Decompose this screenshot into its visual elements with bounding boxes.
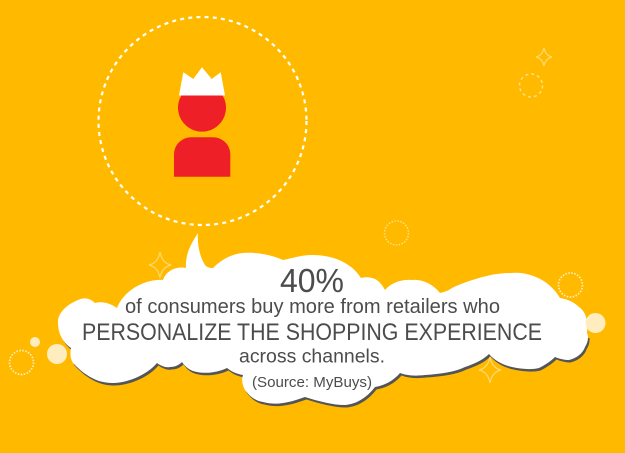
text: across channels: across channels. bbox=[239, 346, 385, 368]
text: of consumers: of consumers buy more from retailers who bbox=[125, 296, 500, 318]
sparkle top right bbox=[536, 48, 552, 66]
statistic 40%: 40% bbox=[280, 262, 344, 299]
sparkle left bbox=[149, 252, 171, 278]
dotted circle left bbox=[10, 350, 34, 374]
dotted circle right bbox=[558, 273, 582, 297]
dashed circle with crowned customer bbox=[98, 17, 306, 225]
pale dot right bbox=[586, 313, 606, 333]
pale dot left large bbox=[47, 344, 67, 364]
speech cloud bbox=[58, 233, 590, 408]
dotted circle center bbox=[384, 221, 408, 245]
text: personalize: PERSONALIZE THE SHOPPING EXPERIENCE bbox=[82, 319, 542, 346]
sparkle bottom right bbox=[479, 357, 501, 383]
pale dot left small bbox=[30, 337, 40, 347]
dotted circle top right bbox=[520, 74, 542, 97]
text: source: (Source: MyBuys) bbox=[252, 374, 372, 391]
icon: crowned customer bbox=[174, 67, 230, 177]
